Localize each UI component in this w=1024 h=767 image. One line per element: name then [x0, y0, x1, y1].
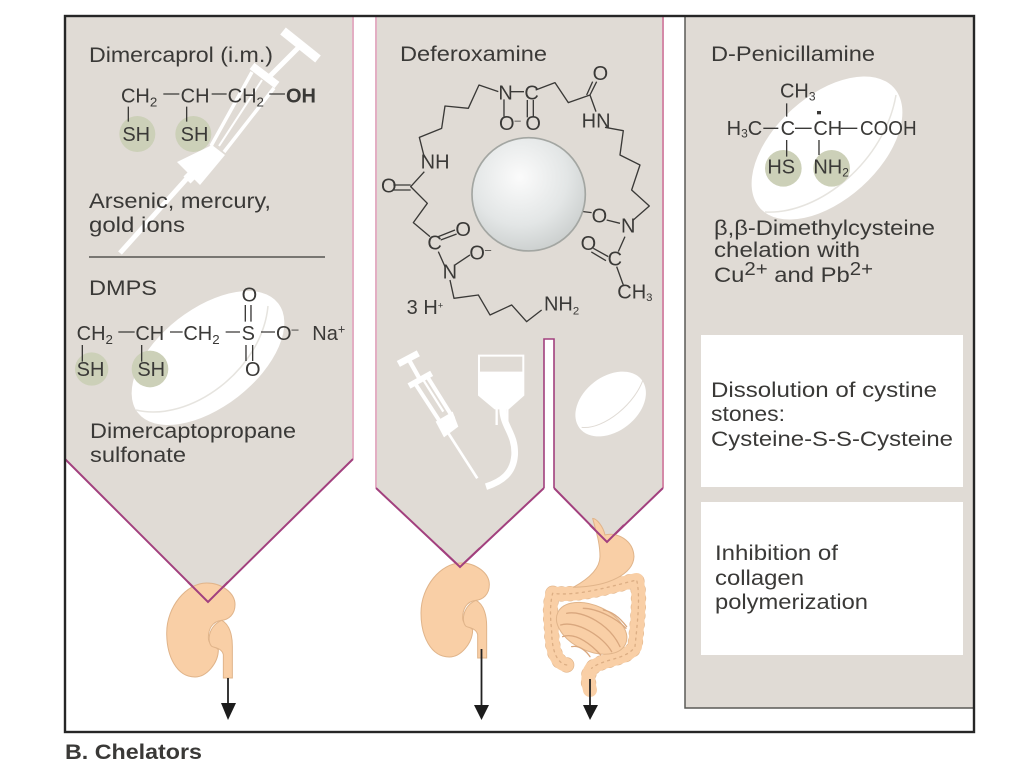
- box: inhibition of collagen polymerization: Inhibition of: [715, 542, 838, 565]
- chemical structure: deferoxamine ring with metal ion: N: [621, 216, 635, 238]
- chemical structure: deferoxamine ring with metal ion: O: [592, 206, 607, 228]
- chemical structure: DMPS: O: [242, 285, 257, 307]
- chemical structure: penicillamine: H: [727, 118, 741, 140]
- text: Dimercaptopropane sulfonate: Dimercaptopropane: [90, 420, 296, 443]
- chemical structure: deferoxamine ring with metal ion: C: [608, 249, 622, 271]
- icon: tablet: [108, 265, 308, 451]
- icon: kidney middle: [421, 563, 489, 658]
- text: chelation description: 2+: [744, 259, 768, 279]
- small intestine: [548, 592, 635, 665]
- icon: oral tablet: [563, 358, 658, 450]
- chemical structure: deferoxamine ring with metal ion: O: [525, 113, 541, 135]
- icons: syringe, infusion bag and tablet: [398, 353, 658, 487]
- chemical structure: deferoxamine ring with metal ion: N: [443, 262, 457, 284]
- heading: D-Penicillamine: D-Penicillamine: [711, 43, 875, 66]
- text: Dimercaptopropane sulfonate: sulfonate: [90, 444, 186, 467]
- box: dissolution of cystine stones: stones:: [711, 403, 785, 426]
- text: chelation description: Cu: [714, 264, 741, 287]
- chemical structure: DMPS: –: [292, 322, 300, 336]
- panel: D-penicillamine: [685, 16, 973, 708]
- chemical structure: dimercaprol: OH: [286, 86, 316, 108]
- heading: DMPS: DMPS: [89, 277, 157, 300]
- panel: dimercaprol and DMPS: [65, 16, 353, 602]
- chemical structure: dimercaprol: CH: [181, 86, 210, 108]
- chemical structure: DMPS: 2: [212, 332, 220, 347]
- chemical structure: dimercaprol: CH: [228, 86, 257, 108]
- text: Arsenic, mercury, gold ions: [89, 190, 271, 237]
- box: dissolution of cystine stones: Dissolution of cystine: [711, 379, 937, 402]
- text: chelation description: β,β-Dimethylcysteine: [714, 217, 935, 240]
- text: chelation description: and Pb: [768, 264, 850, 287]
- heading: Deferoxamine: Deferoxamine: [400, 43, 547, 66]
- chemical structure: deferoxamine ring with metal ion: O: [593, 63, 608, 85]
- chemical structure: deferoxamine ring with metal ion: [381, 63, 652, 322]
- chemical structure: deferoxamine ring with metal ion: HN: [582, 110, 611, 132]
- icon: small syringe: [398, 353, 477, 478]
- chemical structure: penicillamine: HS: [767, 156, 795, 178]
- chemical structure: DMPS: SH: [77, 359, 104, 381]
- chemical structure: deferoxamine ring with metal ion: –: [515, 115, 522, 127]
- box: inhibition of collagen polymerization: polymerization: [715, 591, 868, 614]
- esophagus and stomach: [573, 518, 634, 587]
- chemical structure: penicillamine: C: [748, 118, 762, 140]
- chemical structure: deferoxamine ring with metal ion: O: [469, 242, 485, 264]
- arrow pointers: panel tips over organs: [188, 525, 624, 602]
- chemical structure: penicillamine: NH: [813, 156, 842, 178]
- heading: Dimercaprol: Dimercaprol (i.m.): [89, 44, 273, 67]
- chemical structure: deferoxamine ring with metal ion: O: [381, 176, 397, 198]
- chemical structure: deferoxamine ring with metal ion: C: [427, 232, 442, 254]
- chemical structure: deferoxamine ring with metal ion: NH: [544, 294, 573, 316]
- chemical structure: penicillamine: C: [781, 118, 795, 140]
- arrow: intestinal excretion: [583, 679, 598, 720]
- metal ion sphere: [472, 138, 585, 251]
- chemical structure: deferoxamine ring with metal ion: 3 H: [407, 297, 438, 319]
- chemical structure: dimercaprol: SH: [181, 124, 208, 146]
- panel: deferoxamine: [376, 16, 663, 567]
- chemical structure: DMPS: SH: [137, 359, 165, 381]
- large intestine: [551, 580, 639, 690]
- text: Dimercaptopropane sulfonate: [90, 420, 296, 467]
- chemical structure: DMPS: O: [276, 323, 292, 345]
- chemical structure: dimercaprol: [119, 86, 316, 152]
- chemical structure: penicillamine: 3: [741, 127, 748, 141]
- chemical structure: deferoxamine ring with metal ion: 2: [573, 306, 579, 318]
- text: Arsenic, mercury, gold ions: gold ions: [89, 214, 185, 237]
- chemical structure: DMPS: O: [245, 359, 261, 381]
- chemical structure: dimercaprol: CH: [121, 86, 150, 108]
- chemical structure: deferoxamine ring with metal ion: O: [581, 233, 596, 255]
- chemical structure: penicillamine: COOH: [860, 118, 917, 140]
- chemical structure: penicillamine: CH: [780, 80, 809, 102]
- caption: B. Chelators: B. Chelators: [65, 741, 202, 764]
- chemical structure: deferoxamine ring with metal ion: 3: [646, 292, 652, 304]
- chemical structure: penicillamine: [727, 80, 917, 187]
- text: Arsenic, mercury, gold ions: Arsenic, mercury,: [89, 190, 271, 213]
- chemical structure: penicillamine: 2: [842, 166, 849, 180]
- chemical structure: deferoxamine ring with metal ion: O: [499, 113, 515, 135]
- box: dissolution of cystine stones: [701, 335, 963, 487]
- box: dissolution of cystine stones: Cysteine-S-S-Cysteine: [711, 428, 953, 451]
- chemical structure: DMPS: CH: [135, 323, 164, 345]
- text: chelation description: chelation with: [714, 239, 860, 262]
- chemical structure: DMPS: S: [242, 323, 255, 345]
- chemical structure: deferoxamine ring with metal ion: CH: [617, 281, 646, 303]
- chemical structure: dimercaprol: 2: [150, 95, 157, 110]
- chemical structure: deferoxamine ring with metal ion: C: [524, 82, 539, 104]
- icon: tablet: [725, 49, 929, 247]
- arrow: middle kidney excretion: [474, 649, 489, 720]
- chemical structure: dimercaprol: 2: [257, 95, 264, 110]
- chemical structure: deferoxamine ring with metal ion: N: [498, 82, 513, 104]
- chemical structure: DMPS: +: [338, 322, 345, 336]
- icon: stomach and intestines: [548, 518, 639, 690]
- chemical structure: penicillamine: CH: [813, 118, 842, 140]
- text: chelation description: [714, 217, 935, 287]
- chemical structure: dimercaprol: SH: [122, 124, 150, 146]
- chemical structure: DMPS: [75, 285, 345, 387]
- chemical structure: DMPS: 2: [106, 332, 113, 347]
- text: chelation description: 2+: [850, 259, 873, 279]
- chemical structure: DMPS: CH: [183, 323, 212, 345]
- chemical structure: DMPS: CH: [77, 323, 106, 345]
- arrow: left kidney excretion: [221, 678, 236, 720]
- icon: syringe: [120, 31, 318, 253]
- icon: infusion bag: [479, 356, 523, 487]
- chemical structure: penicillamine: 3: [809, 90, 816, 104]
- chemical structure: deferoxamine ring with metal ion: NH: [421, 151, 450, 173]
- chemical structure: deferoxamine ring with metal ion: O: [455, 219, 471, 241]
- chemical structure: deferoxamine ring with metal ion: –: [485, 244, 492, 256]
- box: inhibition of collagen polymerization: collagen: [715, 567, 804, 590]
- icon: kidney left: [167, 583, 235, 678]
- chemical structure: DMPS: Na: [312, 323, 338, 345]
- box: inhibition of collagen polymerization: [701, 502, 963, 655]
- chemical structure: deferoxamine ring with metal ion: +: [438, 301, 443, 311]
